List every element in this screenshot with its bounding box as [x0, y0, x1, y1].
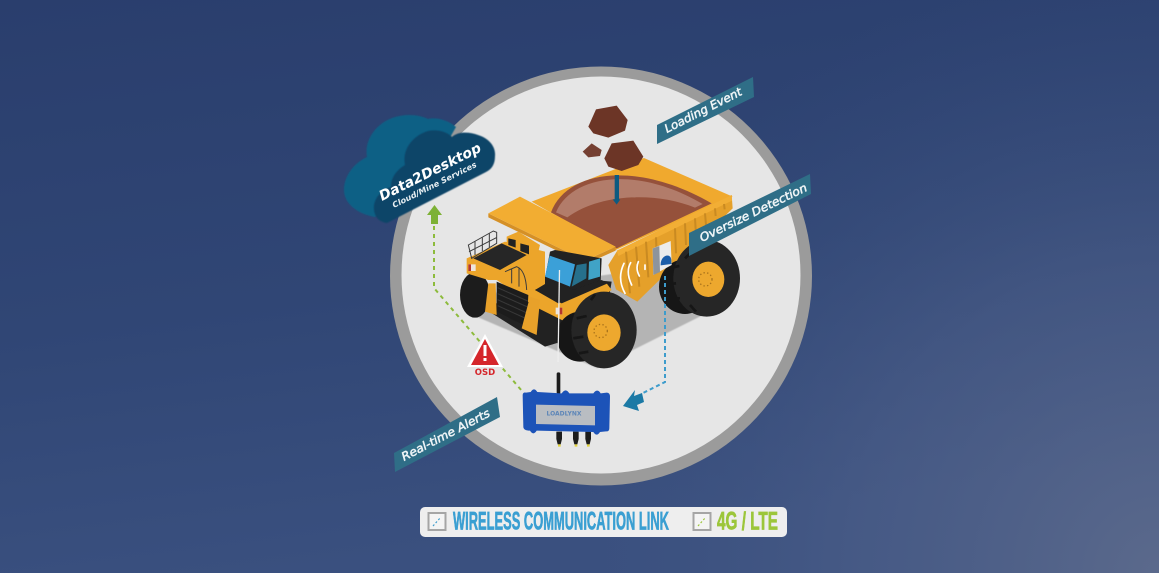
banner: Loading Event: Loading Event [662, 84, 745, 136]
front wheel [557, 292, 637, 368]
banner: Real-time Alerts [394, 397, 500, 472]
dump truck front: chassis, cab and front wheel [460, 197, 637, 368]
arrow: green up [427, 205, 442, 224]
safety rail [468, 231, 527, 290]
enclosure [523, 389, 610, 435]
canopy [488, 197, 616, 264]
main yellow body [467, 242, 612, 322]
cloud front layer [374, 130, 495, 223]
OSD label: OSD [475, 368, 495, 378]
dump truck rear: bed, canopy and rear wheel [532, 158, 733, 250]
drop arrow [613, 175, 620, 205]
alert icon: OSD [467, 334, 503, 378]
falling rocks [583, 106, 643, 205]
headlamps [468, 264, 562, 314]
rock large [588, 106, 628, 138]
cab [535, 250, 608, 303]
truck shadow [468, 270, 727, 368]
cloud back layer [344, 115, 456, 217]
rock medium [604, 141, 643, 171]
device label: LOADLYNX [547, 410, 582, 417]
legend icon: wireless [428, 513, 446, 530]
cloud subtitle: Cloud/Mine Services [391, 160, 478, 210]
signal waves [621, 262, 645, 293]
cloud: Data2Desktop [344, 115, 495, 223]
connector: blue detection path [643, 276, 665, 393]
panel: circular stage [390, 66, 812, 486]
roof units [507, 232, 540, 255]
grille side panels [485, 283, 540, 335]
arrow: blue pointing to gateway [623, 390, 644, 411]
dark deck plate [473, 243, 527, 270]
grille [497, 282, 528, 327]
connector tips [558, 444, 590, 447]
banner: Real-time Alerts: Real-time Alerts [399, 406, 492, 464]
cloud title: Data2Desktop [377, 140, 484, 205]
banner: Oversize Detection: Oversize Detection [697, 180, 809, 245]
lamp accents [468, 264, 562, 314]
sensor box [653, 241, 672, 275]
antenna [557, 372, 560, 394]
connector: green uplink path [434, 226, 522, 391]
gateway device [523, 372, 610, 447]
white antenna lead [558, 270, 560, 362]
legend bar [420, 507, 787, 537]
bed inner wall [532, 158, 733, 250]
rear wheel [659, 240, 740, 317]
connectors [556, 432, 591, 444]
left front tyre [460, 272, 490, 318]
ore load [551, 175, 712, 248]
legend label: wireless: WIRELESS COMMUNICATION LINK [453, 508, 669, 536]
lower chassis [487, 275, 612, 347]
banner: Loading Event [657, 77, 754, 144]
bed side [608, 195, 740, 317]
rock small [583, 143, 602, 157]
legend label: 4G / LTE: 4G / LTE [717, 508, 778, 536]
banner: Oversize Detection [689, 174, 811, 256]
legend icon: 4G [694, 513, 710, 530]
